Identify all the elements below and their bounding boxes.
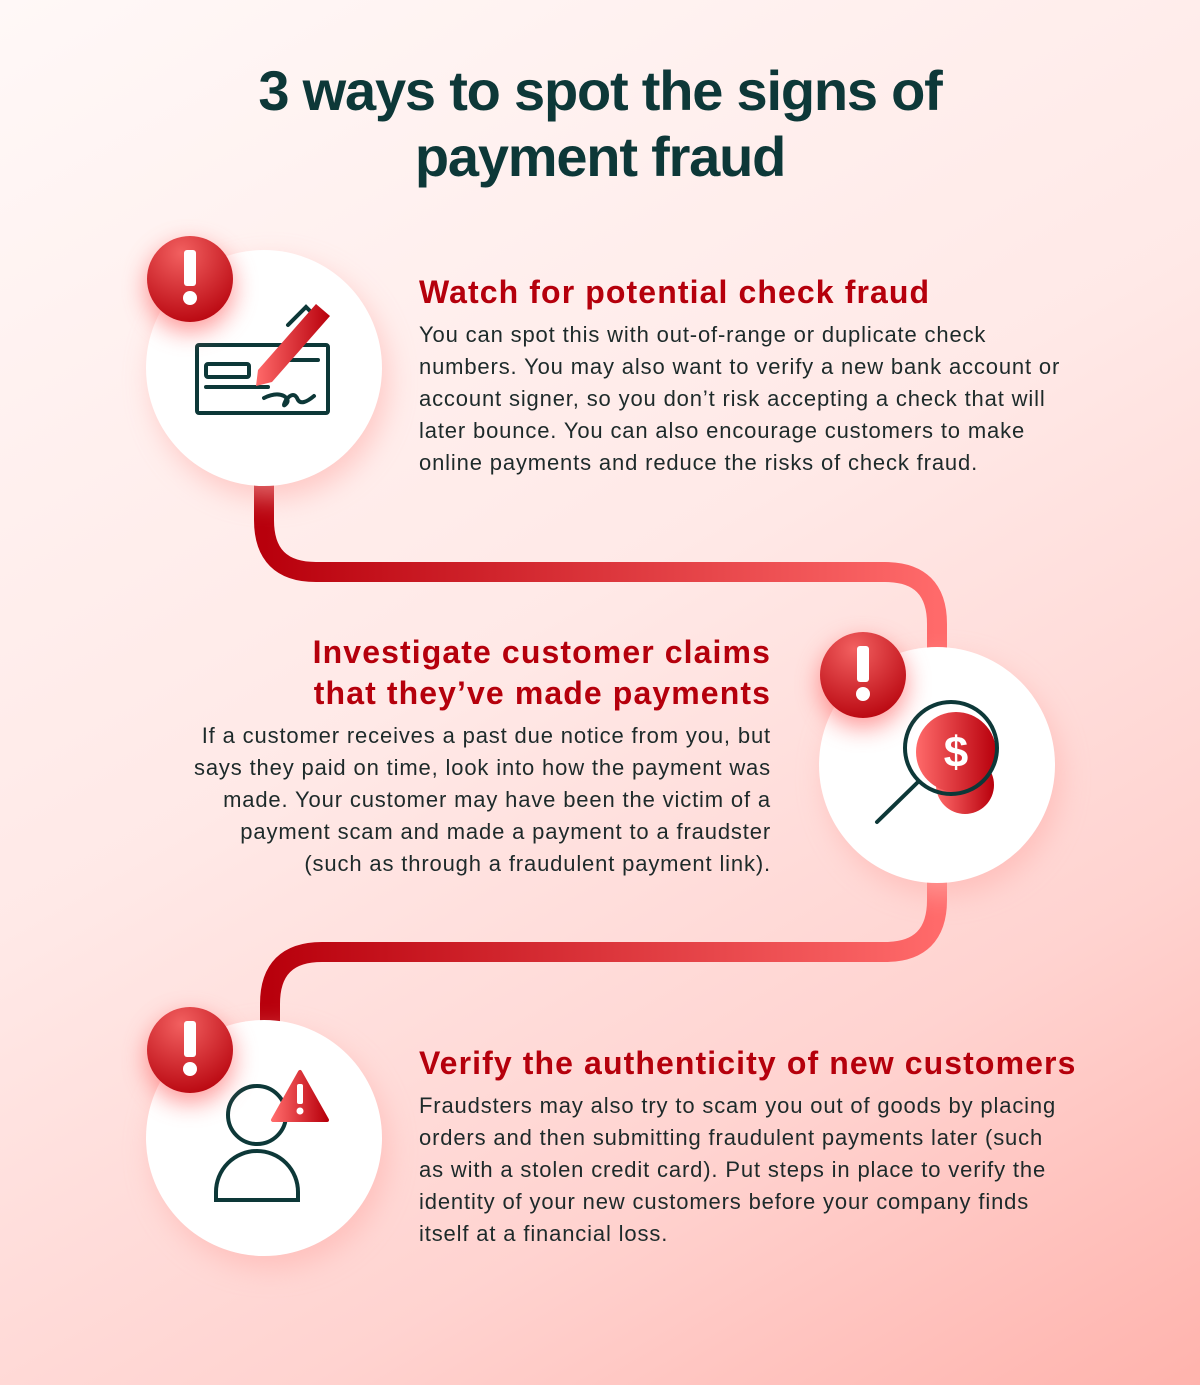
text: check fraud: numbers. You may also want to verify a new bank account or — [419, 354, 1060, 379]
text: customer claims: made. Your customer may have been the victim of a — [223, 787, 771, 812]
text: new customers: itself at a financial loss. — [419, 1221, 668, 1246]
badge 3 — [132, 1002, 249, 1118]
title: payment fraud — [415, 125, 785, 188]
text: check fraud: account signer, so you don’t risk accepting a check that will — [419, 386, 1046, 411]
text: new customers — [419, 1045, 1076, 1246]
text: check fraud: Watch for potential check fraud — [419, 274, 930, 310]
icon: magnifier circle — [819, 647, 1055, 883]
icon: check circle — [146, 250, 382, 486]
text: customer claims: If a customer receives a past due notice from you, but — [202, 723, 771, 748]
text: customer claims: that they’ve made payments — [314, 675, 771, 711]
text: customer claims — [194, 634, 771, 876]
text: check fraud: later bounce. You can also encourage customers to make — [419, 418, 1025, 443]
text: new customers: Verify the authenticity of new customers — [419, 1045, 1076, 1081]
title: 3 ways to spot the signs of — [258, 59, 942, 122]
badge 1 — [132, 230, 249, 349]
text: new customers: Fraudsters may also try to scam you out of goods by placing — [419, 1093, 1056, 1118]
text: customer claims: (such as through a fraudulent payment link). — [304, 851, 771, 876]
text: check fraud: online payments and reduce the risks of check fraud. — [419, 450, 978, 475]
icon: person circle — [146, 1020, 382, 1256]
text: customer claims: Investigate customer claims — [313, 634, 771, 670]
text: new customers: as with a stolen credit card). Put steps in place to verify the — [419, 1157, 1046, 1182]
text: check fraud — [419, 274, 1060, 475]
text: new customers: identity of your new customers before your company finds — [419, 1189, 1029, 1214]
text: check fraud: You can spot this with out-of-range or duplicate check — [419, 322, 986, 347]
badge 2 — [806, 626, 922, 743]
text: new customers: orders and then submitting fraudulent payments later (such — [419, 1125, 1043, 1150]
icon: magnifier circle: $ — [944, 728, 968, 777]
text: customer claims: says they paid on time, look into how the payment was — [194, 755, 771, 780]
text: customer claims: payment scam and made a payment to a fraudster — [240, 819, 771, 844]
title — [258, 59, 943, 188]
